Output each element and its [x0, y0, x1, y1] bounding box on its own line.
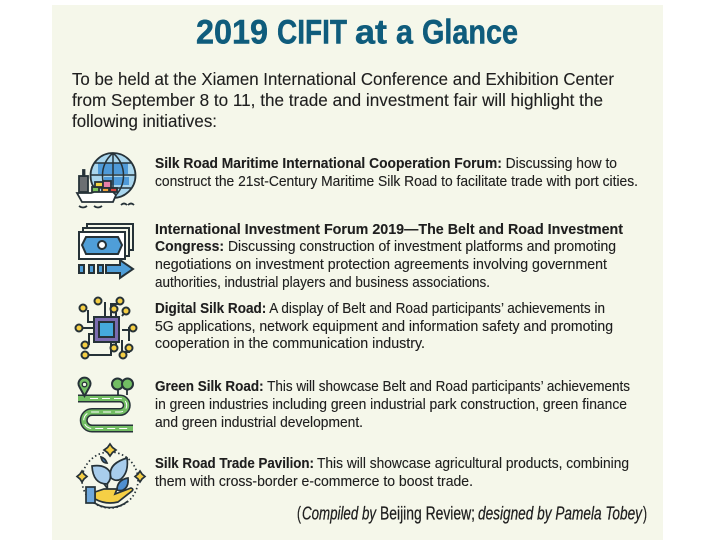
section: International Investment Forum	[155, 222, 623, 291]
icon: banknotes and arrow	[79, 224, 133, 278]
credit line	[297, 504, 647, 524]
credit line: (	[297, 504, 301, 524]
section: Silk Road Trade Pavilion: them with cross-border e-commerce to boost trade.	[155, 474, 473, 490]
section: Silk Road Maritime International Cooperation Forum: Silk Road Maritime International Cooperation Forum: Discussing how to	[155, 156, 617, 172]
icon: green road with map pin and trees	[78, 378, 133, 428]
intro text: from September 8 to 11, the trade and investment fair will highlight the	[72, 90, 603, 110]
title	[196, 14, 518, 52]
section: Green Silk Road: in green industries including green industrial park construction, green finance	[155, 397, 627, 413]
title: a	[396, 14, 414, 52]
title: 2019	[196, 14, 268, 52]
section: International Investment Forum: negotiations on investment protection agreements involving government	[155, 257, 607, 273]
icon: circuit chip	[76, 298, 136, 358]
section: International Investment Forum: Congress: Discussing construction of investment platforms and promoting	[155, 239, 616, 255]
icon: globe and cargo ship	[77, 153, 136, 208]
section: Silk Road Maritime International Cooperation Forum: construct the 21st-Century Maritime Silk Road to facilitate trade with port cities.	[155, 174, 638, 190]
section: Digital Silk Road: cooperation in the communication industry.	[155, 336, 425, 352]
credit line: designed by Pamela Tobey	[478, 504, 643, 524]
section: Silk Road Maritime International Cooperation Forum	[155, 156, 638, 190]
credit line: Compiled by	[302, 504, 377, 524]
title: CIFIT	[277, 14, 347, 52]
credit line: )	[643, 504, 647, 524]
section: Digital Silk Road	[155, 301, 613, 352]
section: International Investment Forum: authorities, industrial players and business associations.	[155, 275, 490, 291]
intro text	[72, 69, 614, 131]
section: Digital Silk Road: Digital Silk Road: A display of Belt and Road participants’ achievements in	[155, 301, 605, 317]
section: Silk Road Trade Pavilion: Silk Road Trade Pavilion:	[155, 456, 314, 472]
section: Silk Road Trade Pavilion	[155, 456, 629, 490]
intro text: following initiatives:	[72, 111, 217, 131]
section: Silk Road Trade Pavilion: This will showcase agricultural products, combining	[317, 456, 629, 472]
intro text: To be held at the Xiamen International Conference and Exhibition Center	[72, 69, 614, 89]
title: at	[355, 14, 387, 52]
section: Green Silk Road: Green Silk Road: This will showcase Belt and Road participants’ achievements	[155, 379, 630, 395]
title: Glance	[422, 14, 518, 52]
credit line: Beijing Review;	[380, 504, 475, 524]
section: International Investment Forum: International Investment Forum 2019—The Belt and Road Investment	[155, 222, 623, 238]
icon: hand holding plant	[77, 444, 145, 508]
section: Digital Silk Road: 5G applications, network equipment and information safety and promoting	[155, 319, 613, 335]
section: Green Silk Road	[155, 379, 630, 431]
section: Green Silk Road: and green industrial development.	[155, 415, 363, 431]
